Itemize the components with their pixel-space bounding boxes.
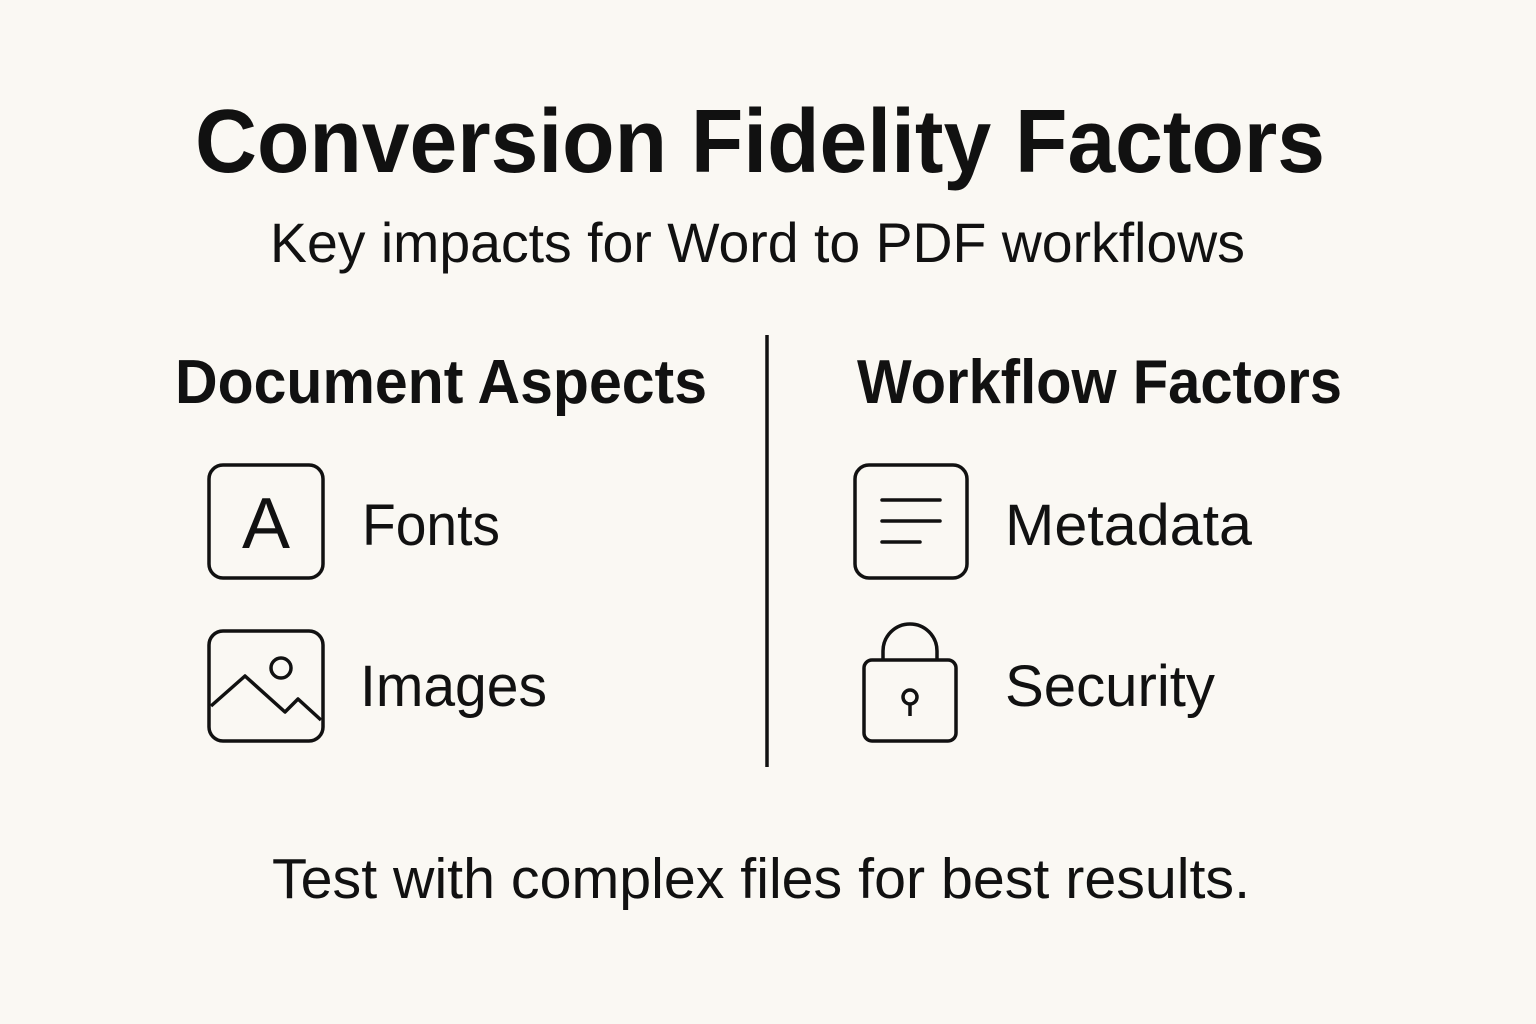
label: Security: Security — [1005, 654, 1215, 719]
icon: security lock — [864, 624, 956, 741]
label: Images: Images — [360, 654, 547, 719]
footer note: Test with complex files for best results. — [272, 847, 1250, 911]
heading: Workflow Factors: Workflow Factors — [857, 348, 1342, 417]
icon: fonts — [209, 465, 323, 578]
label: Fonts: Fonts — [362, 493, 500, 558]
title: Conversion Fidelity Factors — [195, 92, 1325, 192]
subtitle: Key impacts for Word to PDF workflows — [270, 211, 1245, 274]
icon: fonts: A — [242, 484, 290, 564]
icon: metadata — [855, 465, 967, 578]
label: Metadata: Metadata — [1005, 493, 1253, 558]
icon: images — [209, 631, 323, 741]
heading: Document Aspects: Document Aspects — [175, 348, 707, 417]
